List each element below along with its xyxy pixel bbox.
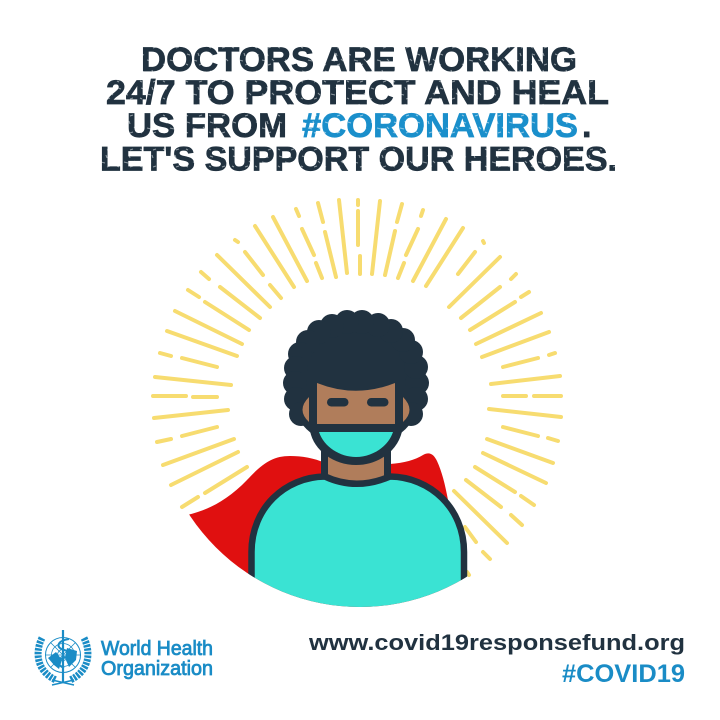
eyes — [327, 398, 388, 406]
title: #CORONAVIRUS — [302, 107, 578, 145]
face mask — [310, 432, 402, 465]
title — [100, 41, 617, 178]
title: LET'S SUPPORT OUR HEROES. — [100, 140, 617, 178]
neck — [321, 451, 391, 480]
WHO logo — [38, 630, 213, 685]
title: DOCTORS ARE WORKING — [141, 41, 577, 79]
fund URL: www.covid19responsefund.org — [308, 630, 685, 655]
WHO wordmark: Organization — [101, 657, 213, 680]
hashtag: #COVID19 — [562, 660, 685, 688]
title: 24/7 TO PROTECT AND HEAL — [106, 74, 609, 112]
WHO wordmark: World Health — [101, 637, 213, 660]
ears — [302, 397, 410, 422]
title: . — [582, 107, 591, 145]
teal scrubs body — [252, 476, 464, 620]
afro hair — [283, 310, 429, 432]
WHO wordmark — [101, 637, 213, 680]
WHO emblem — [38, 630, 88, 685]
face — [317, 383, 395, 424]
red cape — [189, 453, 462, 607]
superhero doctor figure — [187, 310, 470, 620]
title: US FROM — [127, 107, 287, 145]
sun rays — [153, 200, 561, 575]
